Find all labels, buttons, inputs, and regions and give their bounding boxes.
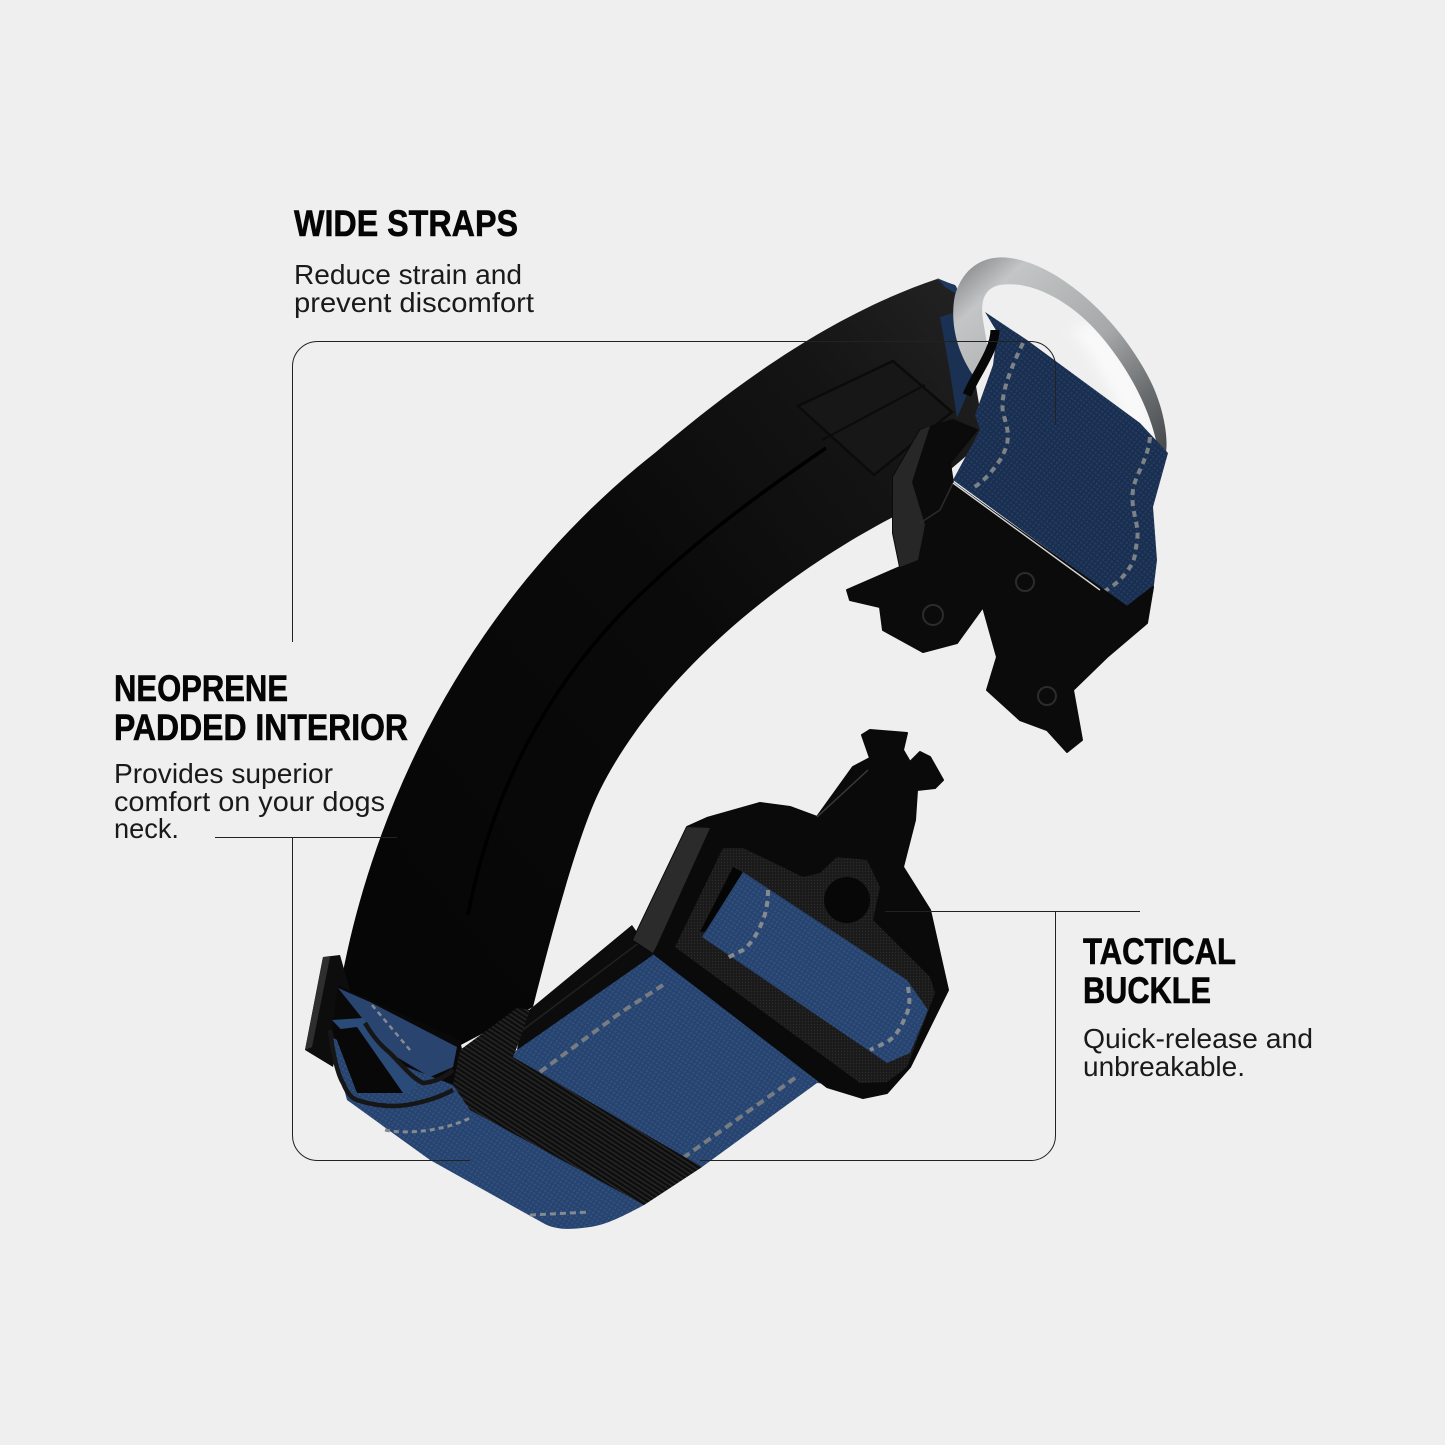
text: tactical buckle description [1083, 1023, 1313, 1082]
text: tactical buckle description: Quick-release and [1083, 1023, 1313, 1054]
callout: tactical buckle [1083, 930, 1313, 1082]
buckle rivets [923, 573, 1056, 705]
collar illustration [305, 257, 1168, 1229]
callout: wide straps [294, 202, 534, 318]
text: neoprene description [114, 758, 385, 844]
strap loop hardware [305, 955, 350, 1067]
heading: neoprene padded interior: PADDED INTERIOR [114, 706, 408, 748]
textured inner frame [675, 848, 935, 1083]
heading: tactical buckle: BUCKLE [1083, 969, 1211, 1011]
left strap wing behind ring [937, 278, 974, 418]
text: neoprene description: Provides superior [114, 758, 333, 789]
heading: tactical buckle: TACTICAL [1083, 930, 1236, 972]
heading: neoprene padded interior: NEOPRENE [114, 667, 288, 709]
dark interior behind rear folds [332, 985, 470, 1095]
lower buckle [633, 730, 948, 1098]
callout frame lines [215, 341, 1140, 1161]
heading: wide straps: WIDE STRAPS [294, 202, 518, 244]
text: neoprene description: neck. [114, 813, 179, 844]
heading: tactical buckle [1083, 930, 1236, 1011]
rear strap folds [338, 988, 457, 1077]
black keeper loop [453, 1008, 702, 1205]
text: wide straps description: prevent discomfort [294, 287, 534, 318]
neoprene padded collar body [340, 279, 985, 1047]
heading: neoprene padded interior [114, 667, 408, 748]
black edge binding [517, 925, 653, 1050]
text: wide straps description: Reduce strain and [294, 259, 522, 290]
lower blue strap [330, 945, 835, 1229]
release button [824, 877, 870, 923]
upper buckle release [847, 420, 1153, 752]
D-ring [953, 257, 1167, 452]
text: neoprene description: comfort on your dogs [114, 786, 385, 817]
text: tactical buckle description: unbreakable. [1083, 1051, 1245, 1082]
upper blue strap [953, 312, 1168, 607]
callout: neoprene padded interior [114, 667, 408, 844]
buckle inner strap [702, 872, 928, 1063]
text: wide straps description [294, 259, 534, 318]
